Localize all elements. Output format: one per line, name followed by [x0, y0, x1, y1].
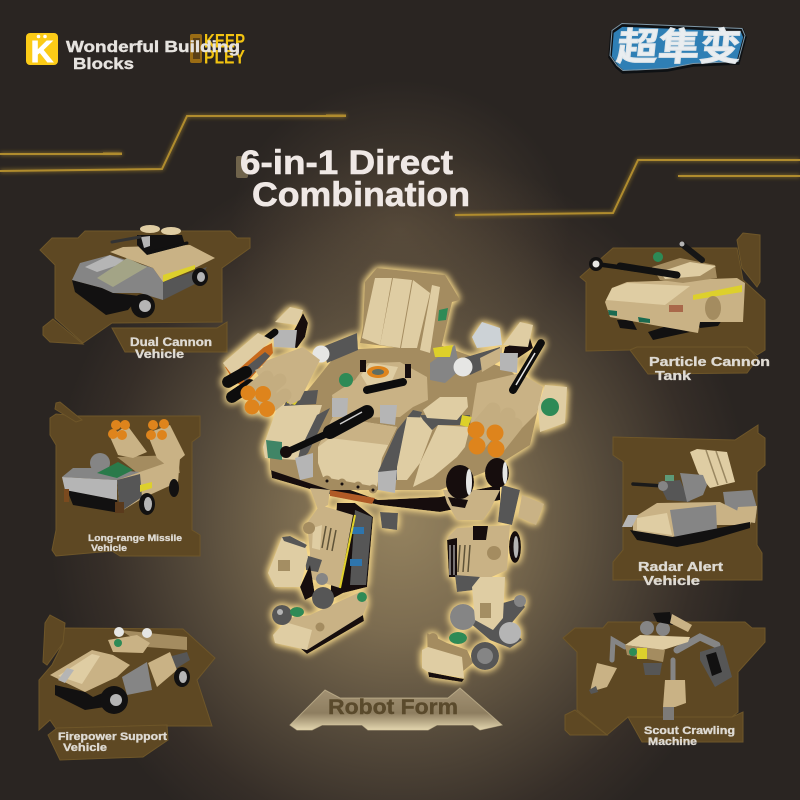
logo badge: 超隼变: 超隼变 [615, 26, 743, 69]
vehicle: dual cannon [72, 225, 215, 318]
label: Machine [648, 736, 697, 748]
label: Dual Cannon [130, 337, 212, 349]
label: Firepower Support [58, 731, 167, 743]
label: Vehicle [643, 573, 700, 588]
vehicle: radar alert [622, 449, 757, 547]
panel frame [40, 231, 250, 352]
label: Tank [655, 369, 691, 383]
title: 6-in-1 Direct [240, 144, 453, 182]
brand name [66, 39, 240, 73]
circuit lines: right [455, 160, 800, 215]
panel: Particle Cannon Tank [580, 233, 770, 383]
panel: Scout Crawling Machine [563, 612, 765, 748]
label [638, 559, 724, 588]
panel frame [563, 622, 765, 742]
panel: Radar Alert Vehicle [613, 425, 765, 588]
label: Vehicle [135, 349, 184, 361]
title [236, 144, 470, 214]
label: Long-range Missile [88, 533, 182, 544]
left arm and weapons [223, 307, 358, 417]
panel frame [39, 615, 215, 760]
vehicle: particle cannon tank [589, 242, 745, 340]
label: Vehicle [63, 742, 107, 754]
icon: K logo [26, 33, 58, 69]
label [88, 533, 182, 554]
plate: Robot Form: Robot Form [328, 696, 458, 719]
right leg [422, 525, 526, 682]
brand logo: Wonderful Building Blocks [26, 32, 245, 73]
label: Scout Crawling [644, 725, 735, 737]
hull [263, 345, 540, 494]
panel: Dual Cannon Vehicle [40, 225, 250, 361]
panel: Firepower Support Vehicle [39, 615, 215, 760]
label: Vehicle [91, 543, 127, 554]
vehicle: scout crawler [589, 612, 732, 720]
vehicle: long-range missile [62, 419, 185, 515]
label: Radar Alert [638, 559, 724, 574]
brand name: Blocks [73, 56, 134, 73]
panel: Long-range Missile Vehicle [50, 402, 200, 556]
left leg [268, 503, 373, 654]
plate: Robot Form [290, 688, 502, 730]
panel frame [50, 402, 200, 556]
logo: Keep Pley: KEEP [204, 32, 245, 52]
wheels [446, 458, 509, 499]
right arm and weapons [430, 322, 567, 499]
label [130, 337, 212, 361]
torso underside [270, 463, 544, 530]
circuit lines: left [0, 116, 346, 171]
title: Combination [252, 176, 470, 214]
panel frame [613, 425, 765, 580]
icon: K logo: K [31, 34, 54, 69]
brand name: Wonderful Building [66, 39, 240, 56]
central turret [280, 360, 480, 458]
label [644, 725, 735, 748]
panel frame [580, 233, 765, 374]
vehicle: firepower support [50, 627, 190, 714]
logo: Keep Pley: PLEY [204, 48, 245, 68]
label: Particle Cannon [649, 355, 770, 369]
radar plate [360, 268, 460, 353]
logo: Keep Pley [190, 32, 245, 68]
label [649, 355, 770, 383]
label [58, 731, 167, 754]
main robot model [223, 268, 567, 682]
